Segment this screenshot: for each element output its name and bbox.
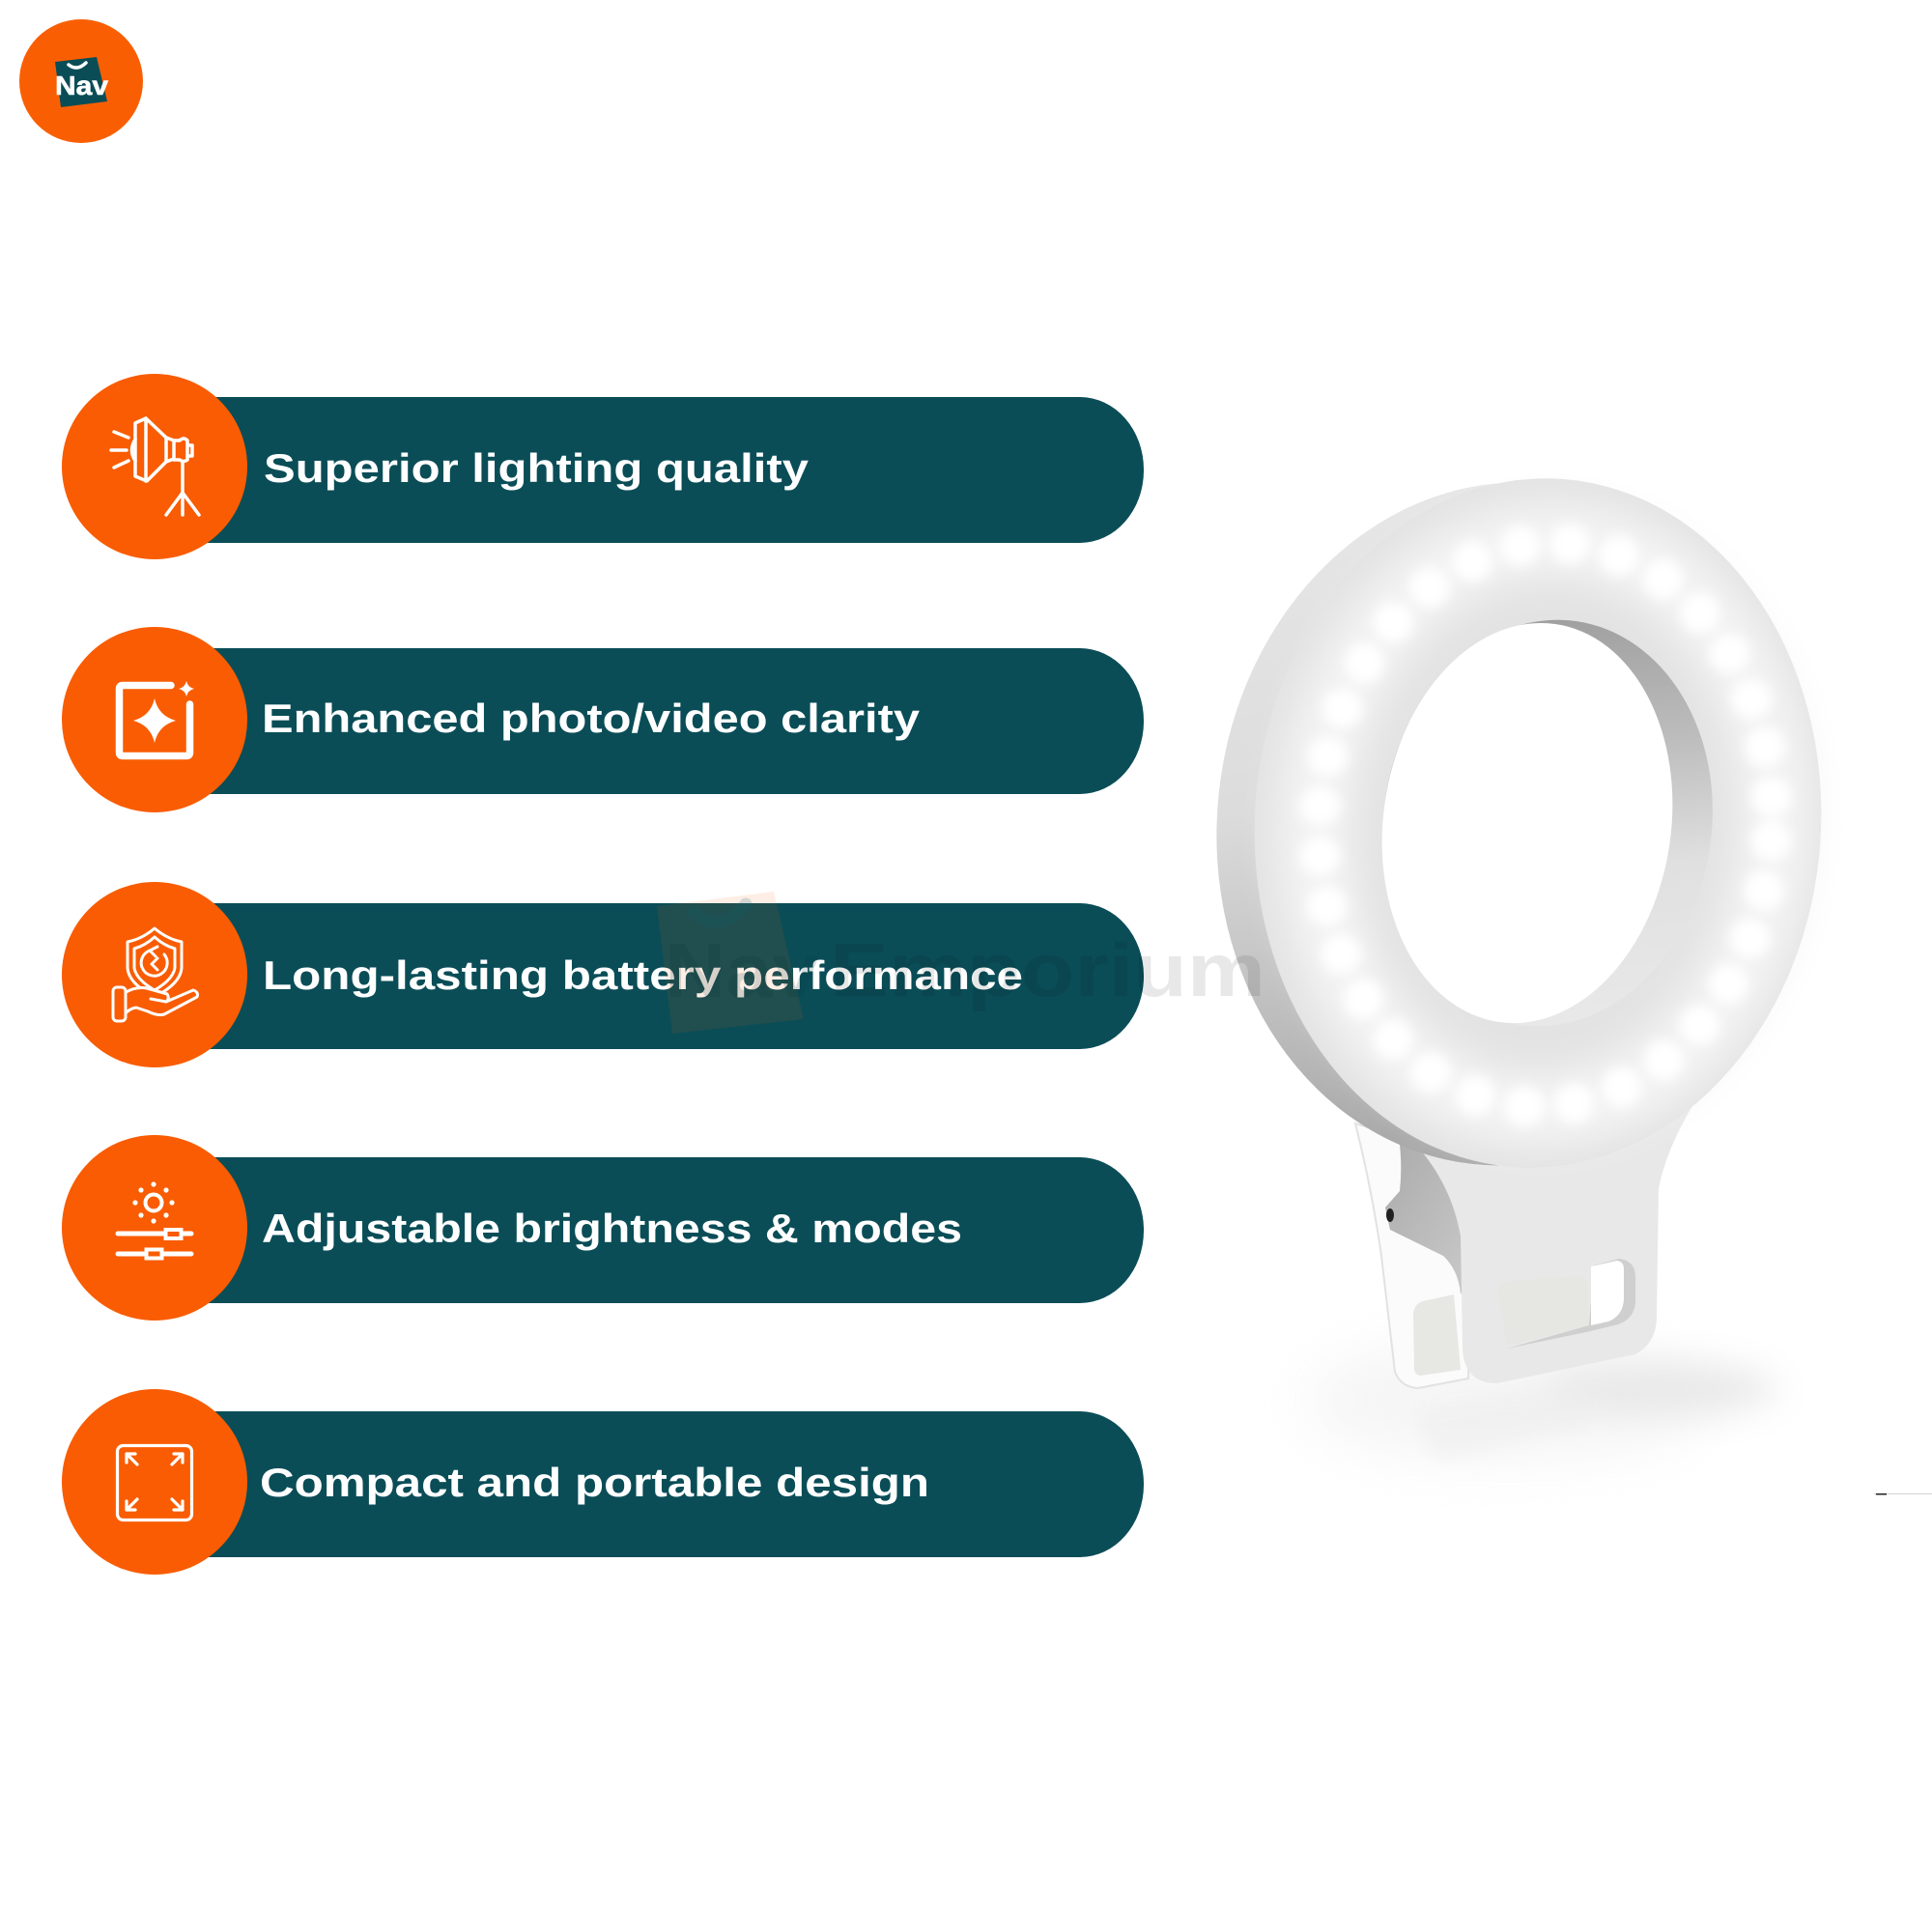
icon: shield in hand bbox=[113, 928, 197, 1021]
icon circle bbox=[62, 1389, 247, 1575]
rear clip strip bbox=[1355, 1123, 1468, 1388]
icon circle bbox=[62, 882, 247, 1067]
ring inner wall bbox=[1356, 598, 1739, 1048]
bar bbox=[145, 1157, 1144, 1303]
icon: studio light bbox=[111, 418, 199, 515]
clip window inner edge bbox=[1507, 1259, 1635, 1349]
icon: sparkle photo bbox=[120, 681, 194, 755]
clip window bbox=[1591, 1261, 1624, 1325]
floor shadow bbox=[1304, 1343, 1777, 1460]
clip hinge wedge bbox=[1372, 1111, 1488, 1294]
label: Adjustable brightness & modes bbox=[262, 1206, 962, 1251]
ring opening bbox=[1357, 604, 1697, 1042]
front clip body bbox=[1391, 1106, 1692, 1383]
feature row 3 bbox=[62, 882, 1144, 1067]
ring back rim bbox=[1183, 453, 1834, 1195]
label: Long-lasting battery performance bbox=[263, 952, 1023, 998]
logo: Nav badge bbox=[19, 19, 143, 143]
feature row 2 bbox=[62, 627, 1144, 812]
label: Enhanced photo/video clarity bbox=[262, 696, 921, 741]
icon circle bbox=[62, 1135, 247, 1321]
bar bbox=[145, 903, 1144, 1049]
watermark: Nav Emporium bbox=[657, 892, 1265, 1034]
logo: Nav badge: Nav bbox=[55, 71, 108, 100]
stray line mark bbox=[1874, 1493, 1932, 1495]
icon: brightness sliders bbox=[118, 1181, 191, 1258]
clip pad bbox=[1497, 1276, 1589, 1346]
icon circle bbox=[62, 627, 247, 812]
label: Compact and portable design bbox=[260, 1460, 929, 1505]
LED dots bbox=[1300, 527, 1791, 1122]
bar bbox=[145, 1411, 1144, 1557]
feature row 1 bbox=[62, 374, 1144, 559]
watermark: Nav Emporium: Nav bbox=[665, 927, 820, 1013]
hinge pin bbox=[1386, 1208, 1394, 1222]
rear clip pad bbox=[1413, 1294, 1461, 1376]
LED glow band bbox=[1296, 524, 1795, 1126]
icon circle bbox=[62, 374, 247, 559]
product: clip-on ring light bbox=[1183, 453, 1844, 1460]
icon: expand frame bbox=[118, 1445, 191, 1520]
watermark: Nav Emporium: Emporium bbox=[830, 927, 1265, 1012]
feature row 4 bbox=[62, 1135, 1144, 1321]
ring face bbox=[1232, 459, 1844, 1187]
bar bbox=[145, 397, 1144, 543]
feature row 5 bbox=[62, 1389, 1144, 1575]
label: Superior lighting quality bbox=[264, 445, 810, 491]
bar bbox=[145, 648, 1144, 794]
